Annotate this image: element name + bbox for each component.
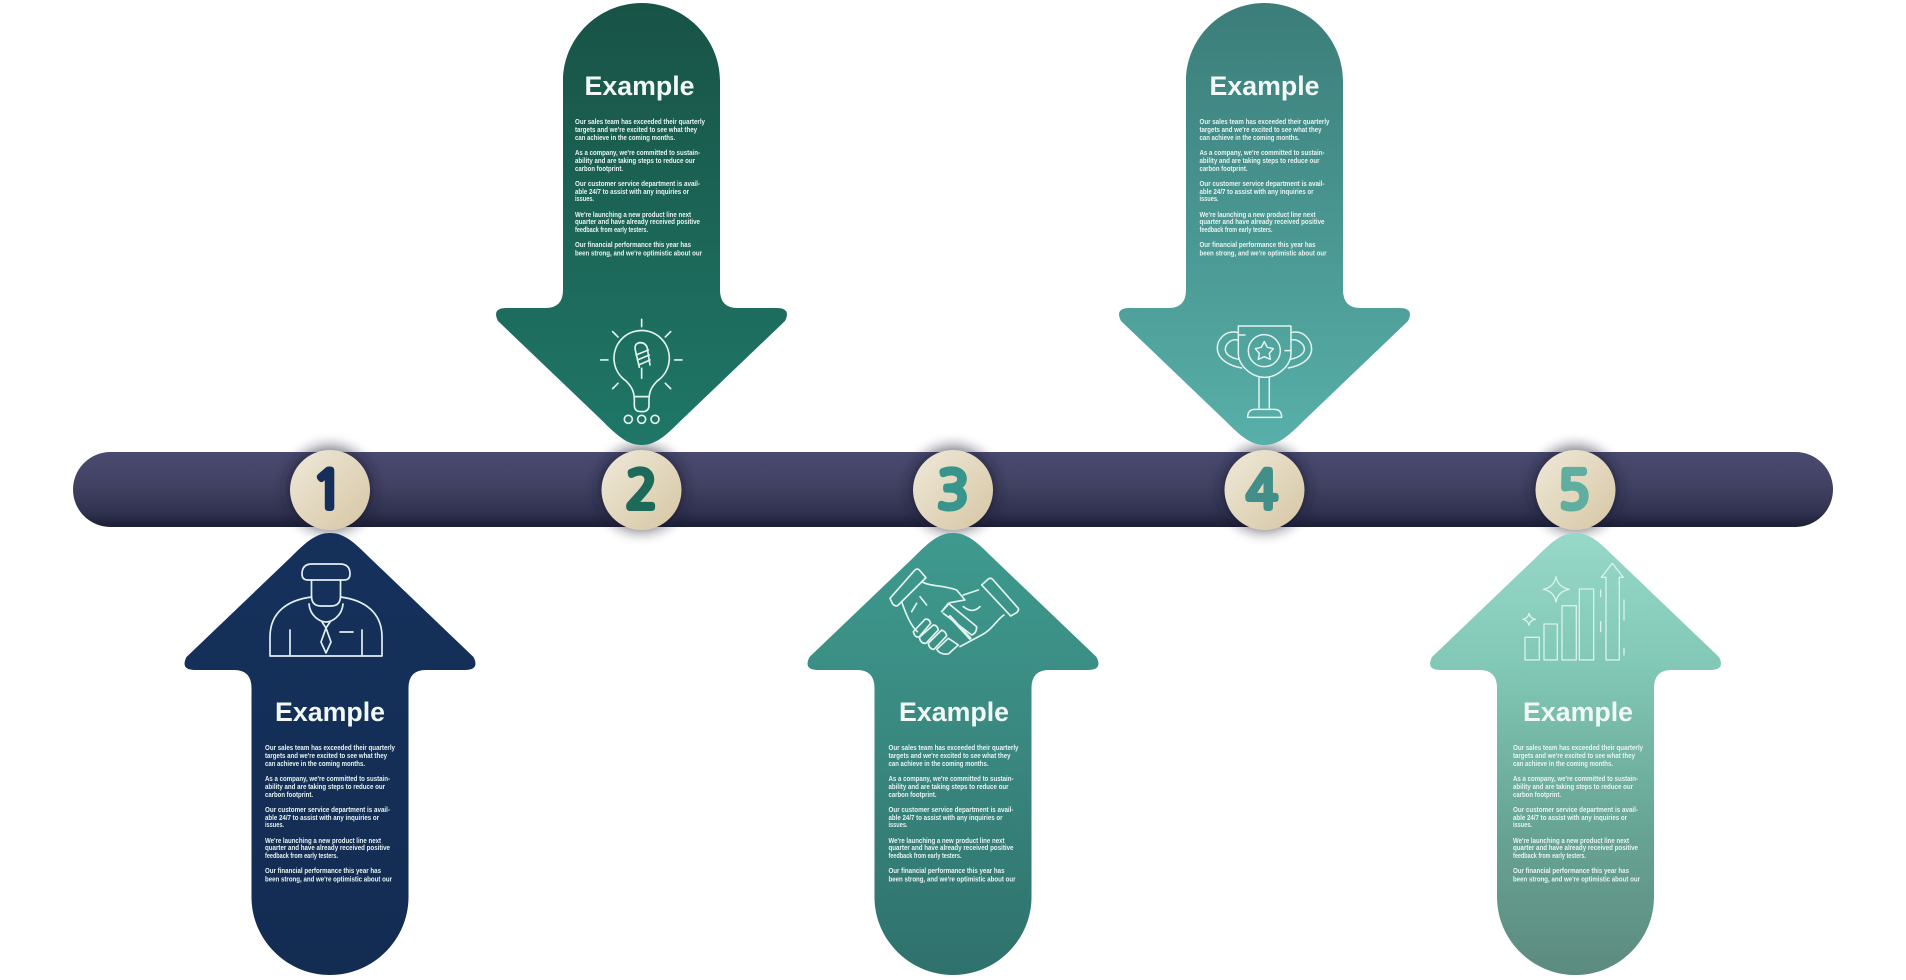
heading: example 2: Example bbox=[584, 71, 694, 101]
text block: description 4: issues. bbox=[1200, 196, 1219, 203]
text block: description 4: targets and we're excited to see what they bbox=[1200, 127, 1322, 134]
icon: trophy bbox=[1217, 326, 1312, 417]
text block: description 2: Our sales team has exceeded their quarterly bbox=[575, 119, 705, 126]
text block: description 1 bbox=[265, 745, 395, 884]
text block: description 5: feedback from early testers. bbox=[1513, 853, 1586, 860]
text block: description 2: carbon footprint. bbox=[575, 166, 623, 173]
text block: description 5: Our financial performance this year has bbox=[1513, 868, 1629, 875]
text block: description 5: carbon footprint. bbox=[1513, 792, 1561, 799]
text block: description 3: Our customer service department is avail- bbox=[888, 807, 1014, 814]
text block: description 3: been strong, and we're optimistic about our bbox=[888, 877, 1016, 884]
step marker 2: 2 bbox=[626, 465, 657, 516]
text block: description 1: Our financial performance this year has bbox=[265, 868, 381, 875]
text block: description 5: Our sales team has exceeded their quarterly bbox=[1513, 745, 1643, 752]
panel: arrow 2 down bbox=[496, 3, 787, 445]
text block: description 2: been strong, and we're optimistic about our bbox=[575, 251, 702, 258]
text block: description 1: quarter and have already received positive bbox=[265, 845, 390, 852]
text block: description 2: As a company, we're committed to sustain- bbox=[575, 150, 701, 157]
text block: description 3: ability and are taking steps to reduce our bbox=[888, 784, 1009, 791]
text block: description 1: As a company, we're committed to sustain- bbox=[265, 776, 391, 783]
step marker 5: 5 bbox=[1559, 465, 1589, 516]
text block: description 2: We're launching a new product line next bbox=[575, 212, 692, 219]
text block: description 3: Our financial performance this year has bbox=[888, 868, 1005, 875]
text block: description 1: carbon footprint. bbox=[265, 792, 313, 799]
heading: example 1: Example bbox=[275, 697, 385, 727]
text block: description 5: targets and we're excited to see what they bbox=[1513, 753, 1635, 760]
text block: description 1: targets and we're excited to see what they bbox=[265, 753, 387, 760]
text block: description 1: been strong, and we're optimistic about our bbox=[265, 877, 392, 884]
icon: person bbox=[270, 564, 382, 656]
step marker 4 bbox=[1224, 450, 1304, 530]
icon: growth chart bbox=[1523, 563, 1624, 660]
text block: description 2: issues. bbox=[575, 196, 594, 203]
text block: description 3: As a company, we're committed to sustain- bbox=[888, 776, 1014, 783]
text block: description 4: Our sales team has exceeded their quarterly bbox=[1200, 119, 1330, 126]
text block: description 1: Our sales team has exceeded their quarterly bbox=[265, 745, 395, 752]
icon: light bulb bbox=[601, 319, 682, 423]
text block: description 5: issues. bbox=[1513, 822, 1532, 829]
heading: example 4: Example bbox=[1210, 71, 1320, 101]
text block: description 5: been strong, and we're optimistic about our bbox=[1513, 877, 1640, 884]
text block: description 2: feedback from early testers. bbox=[575, 227, 648, 234]
text block: description 1: ability and are taking steps to reduce our bbox=[265, 784, 385, 791]
step marker 5 bbox=[1536, 450, 1616, 530]
text block: description 2: can achieve in the coming months. bbox=[575, 135, 675, 142]
timeline bar bbox=[73, 452, 1833, 527]
text block: description 2: targets and we're excited to see what they bbox=[575, 127, 697, 134]
text block: description 5 bbox=[1513, 745, 1643, 884]
text block: description 4: carbon footprint. bbox=[1200, 166, 1248, 173]
heading: example 5: Example bbox=[1523, 697, 1633, 727]
panel: arrow 1 up bbox=[185, 533, 475, 975]
text block: description 2: quarter and have already received positive bbox=[575, 219, 700, 226]
text block: description 1: We're launching a new product line next bbox=[265, 838, 382, 845]
shadow: step markers bbox=[286, 445, 1620, 533]
step marker 1: 1 bbox=[313, 465, 343, 516]
text block: description 4: feedback from early testers. bbox=[1200, 227, 1273, 234]
text block: description 3: carbon footprint. bbox=[888, 792, 937, 799]
text block: description 5: Our customer service department is avail- bbox=[1513, 807, 1639, 814]
text block: description 3: quarter and have already received positive bbox=[888, 845, 1014, 852]
text block: description 1: Our customer service department is avail- bbox=[265, 807, 391, 814]
text block: description 4: can achieve in the coming months. bbox=[1200, 135, 1300, 142]
step marker 3 bbox=[913, 450, 993, 530]
text block: description 5: quarter and have already received positive bbox=[1513, 845, 1638, 852]
text block: description 4 bbox=[1200, 119, 1330, 258]
text block: description 3: issues. bbox=[888, 822, 908, 829]
text block: description 4: We're launching a new product line next bbox=[1200, 212, 1316, 219]
step marker 1 bbox=[290, 450, 370, 530]
text block: description 3: targets and we're excited to see what they bbox=[888, 753, 1011, 760]
step marker 4: 4 bbox=[1247, 465, 1277, 516]
text block: description 1: feedback from early testers. bbox=[265, 853, 338, 860]
text block: description 2: Our financial performance this year has bbox=[575, 242, 691, 249]
icon: handshake bbox=[890, 569, 1018, 654]
text block: description 4: ability and are taking steps to reduce our bbox=[1200, 158, 1320, 165]
step marker 2 bbox=[602, 450, 682, 530]
text block: description 2 bbox=[575, 119, 705, 258]
text block: description 1: able 24/7 to assist with any inquiries or bbox=[265, 815, 379, 822]
text block: description 2: Our customer service department is avail- bbox=[575, 181, 701, 188]
text block: description 1: can achieve in the coming months. bbox=[265, 761, 365, 768]
text block: description 3: able 24/7 to assist with any inquiries or bbox=[888, 815, 1003, 822]
heading: example 3: Example bbox=[899, 697, 1009, 727]
text block: description 4: Our financial performance this year has bbox=[1200, 242, 1316, 249]
text block: description 3 bbox=[888, 745, 1019, 884]
text block: description 5: can achieve in the coming months. bbox=[1513, 761, 1613, 768]
panel: arrow 4 down bbox=[1119, 3, 1410, 445]
text block: description 4: been strong, and we're optimistic about our bbox=[1200, 251, 1327, 258]
text block: description 1: issues. bbox=[265, 822, 284, 829]
text block: description 5: able 24/7 to assist with any inquiries or bbox=[1513, 815, 1627, 822]
text block: description 3: We're launching a new product line next bbox=[888, 838, 1005, 845]
panel: arrow 3 up bbox=[808, 533, 1098, 975]
text block: description 4: able 24/7 to assist with any inquiries or bbox=[1200, 189, 1314, 196]
text block: description 3: can achieve in the coming months. bbox=[888, 761, 989, 768]
text block: description 2: able 24/7 to assist with any inquiries or bbox=[575, 189, 689, 196]
step marker 3: 3 bbox=[938, 465, 968, 516]
text block: description 5: We're launching a new product line next bbox=[1513, 838, 1630, 845]
text block: description 5: As a company, we're committed to sustain- bbox=[1513, 776, 1639, 783]
text block: description 3: Our sales team has exceeded their quarterly bbox=[888, 745, 1019, 752]
text block: description 4: quarter and have already received positive bbox=[1200, 219, 1325, 226]
panel: arrow 5 up bbox=[1430, 533, 1721, 975]
text block: description 5: ability and are taking steps to reduce our bbox=[1513, 784, 1633, 791]
text block: description 3: feedback from early testers. bbox=[888, 853, 962, 860]
text block: description 2: ability and are taking steps to reduce our bbox=[575, 158, 695, 165]
text block: description 4: As a company, we're committed to sustain- bbox=[1200, 150, 1325, 157]
text block: description 4: Our customer service department is avail- bbox=[1200, 181, 1325, 188]
